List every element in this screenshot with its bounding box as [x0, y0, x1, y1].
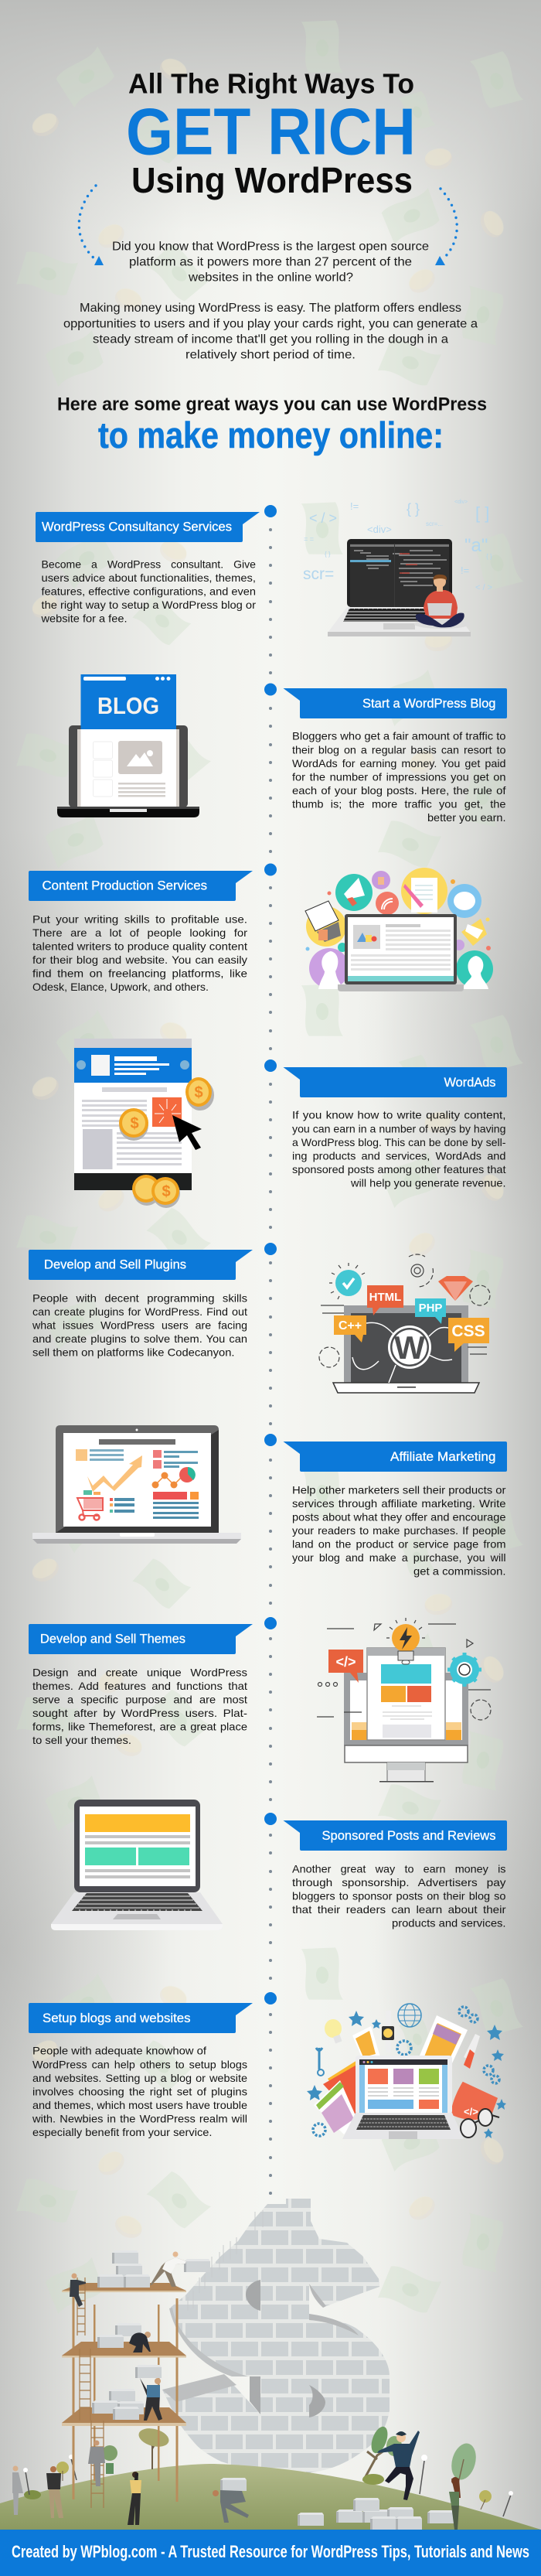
illustration: hill with brick dollar sign [0, 2199, 541, 2530]
subheading: to make money online: [98, 415, 444, 455]
panel: Affiliate Marketing: services through affiliate marketing. Write [292, 1497, 506, 1510]
intro text: steady stream of income that'll get you rolling in the dough in a [93, 333, 448, 346]
panel: Content Production Services [29, 871, 253, 993]
intro text: Did you know that WordPress is the largest open source [112, 240, 429, 254]
icon: web tools and laptop [307, 2004, 506, 2139]
icon: blog on laptop: BLOG [97, 692, 159, 719]
icon: ad page with coins and cursor: $ [130, 1115, 139, 1132]
icon: ad page with coins and cursor [74, 1039, 214, 1208]
icon: ad page with coins and cursor: $ [194, 1084, 203, 1101]
subheading [57, 394, 487, 455]
icon: WordPress plugins laptop [319, 1254, 490, 1393]
workers [12, 2252, 461, 2530]
panel: Affiliate Marketing: get a commission. [413, 1564, 505, 1577]
panel: Develop and Sell Plugins: what issues WordPress users are facing [32, 1319, 247, 1331]
panel: Develop and Sell Plugins [29, 1250, 253, 1358]
panel: Setup blogs and websites: Setup blogs and websites [43, 2011, 190, 2025]
panel: Content Production Services: talented writers to produce quality content [32, 940, 247, 952]
panel: WordAds: you can earn in a number of ways by having [292, 1122, 505, 1134]
intro text: opportunities to users and if you play your cards right, you can generate a [63, 317, 478, 331]
panel: Affiliate Marketing: your readers to make purchases. If people [292, 1524, 506, 1537]
icon: laptop with coder: "a" [464, 535, 488, 556]
panel: WordPress Consultancy Services [36, 512, 260, 624]
panel: WordAds: ing products and services, WordAds and [292, 1149, 505, 1162]
intro text: platform as it powers more than 27 percent of the [129, 255, 412, 269]
title [126, 68, 416, 200]
panel: Develop and Sell Plugins: sell them on platforms like Codecanyon. [32, 1346, 235, 1358]
panel: Affiliate Marketing [283, 1442, 507, 1577]
panel: Start a WordPress Blog [283, 688, 507, 824]
timeline dots [264, 505, 277, 2195]
panel: Sponsored Posts and Reviews: that their readers can learn about their [292, 1903, 506, 1916]
panel: Develop and Sell Plugins: can create plugins for WordPress. Find out [32, 1305, 247, 1318]
panel: WordAds: sponsored posts among other features that [292, 1163, 506, 1175]
icon: analytics laptop [32, 1425, 241, 1544]
panel: Affiliate Marketing: Help other marketers sell their products or [292, 1483, 506, 1496]
title: Using WordPress [131, 160, 413, 200]
panel: WordPress Consultancy Services: users advice about functionalities, themes, [42, 571, 256, 584]
icon: blog on laptop [57, 674, 199, 817]
icon: WordPress plugins laptop: CSS [451, 1322, 485, 1340]
icon: sponsored post laptop [51, 1800, 223, 1930]
intro text: relatively short period of time. [185, 348, 356, 362]
panel: Affiliate Marketing: land on the product or service page from [292, 1537, 505, 1550]
icon: laptop with coder: { } [486, 553, 492, 560]
icon: WordPress plugins laptop: HTML [369, 1291, 401, 1304]
icon: ad page with coins and cursor: $ [162, 1183, 171, 1200]
panel: WordPress Consultancy Services: the right way to setup a WordPress blog or [42, 599, 256, 611]
panel: Sponsored Posts and Reviews: through sponsorship. Advertisers pay [292, 1876, 505, 1888]
panel: Setup blogs and websites: involves choosing the right set of plugins [32, 2085, 247, 2097]
panel: WordPress Consultancy Services: features, effective configurations, and even [42, 585, 256, 597]
icon: laptop with coder: = = [304, 535, 314, 543]
panel: Content Production Services: Content Production Services [42, 879, 207, 893]
panel: Sponsored Posts and Reviews [283, 1820, 507, 1929]
panel: Setup blogs and websites [29, 2003, 253, 2138]
panel: Start a WordPress Blog: thumb is; the more traffic you get, the [292, 797, 506, 810]
panel: Sponsored Posts and Reviews: Another great way to earn money is [292, 1862, 505, 1875]
panel: Develop and Sell Plugins: and create plugins to solve them. You can [32, 1332, 247, 1345]
panel: WordPress Consultancy Services: website for a fee. [40, 612, 127, 624]
icon: laptop with coder [303, 500, 492, 636]
panel: Content Production Services: Put your writing skills to profitable use. [32, 913, 247, 925]
panel: Setup blogs and websites: People with adequate knowhow of [32, 2045, 206, 2057]
panel: Develop and Sell Themes: themes. Add features and functions that [32, 1680, 247, 1692]
intro text: Making money using WordPress is easy. The platform offers endless [80, 302, 461, 315]
panel: Develop and Sell Themes: sought after by WordPress users. Plat- [32, 1707, 247, 1719]
panel: Start a WordPress Blog: Start a WordPress Blog [362, 696, 496, 711]
panel: WordPress Consultancy Services: Become a WordPress consultant. Give [42, 558, 256, 570]
icon: WordPress plugins laptop: W [394, 1329, 425, 1366]
panel: Develop and Sell Themes [29, 1624, 253, 1746]
icon: WordPress plugins laptop: C++ [339, 1319, 362, 1332]
icon: web tools and laptop: </> [464, 2106, 478, 2117]
icon: theme monitor [317, 1618, 491, 1782]
hill [0, 2464, 541, 2530]
panel: Content Production Services: Odesk, Elance, Upwork, and others. [32, 981, 209, 993]
trees and lamps [23, 2424, 513, 2516]
panel: Affiliate Marketing: your blog and make a purchase, you will [292, 1551, 505, 1564]
title: GET RICH [126, 96, 416, 169]
panel: Setup blogs and websites: WordPress can help others to setup blogs [32, 2058, 247, 2070]
panel: Content Production Services: find them on freelancing platforms, like [32, 967, 247, 979]
icon: laptop with coder: [ ] [475, 503, 489, 523]
panel: WordAds: a WordPress blog. This can be done by sell- [292, 1136, 506, 1148]
panel: Affiliate Marketing: posts about what they offer and encourage [292, 1510, 506, 1523]
panel: Setup blogs and websites: and websites. Setting up a blog or website [32, 2072, 247, 2084]
brick dollar sign [162, 2199, 390, 2504]
panel: Develop and Sell Themes: forms, like Themeforest, are a great place [32, 1720, 247, 1732]
subheading: Here are some great ways you can use WordPress [57, 394, 487, 415]
icon: theme monitor: </> [335, 1654, 356, 1670]
stone blocks [92, 2250, 454, 2530]
dotted arrows around intro [79, 186, 457, 265]
panel: Develop and Sell Themes: serve a specific purpose and are most [32, 1693, 247, 1705]
panel: Setup blogs and websites: and themes, which most users have trouble [32, 2099, 247, 2111]
intro text [63, 240, 478, 362]
panel: Sponsored Posts and Reviews: Sponsored Posts and Reviews [322, 1828, 496, 1843]
panel: Develop and Sell Themes: Develop and Sell Themes [40, 1632, 185, 1646]
icon: laptop with coder: < / > [309, 510, 337, 526]
icon: laptop with coder: { } [407, 501, 420, 517]
scaffolding [62, 2277, 186, 2508]
panel: Develop and Sell Themes: Design and create unique WordPress [32, 1666, 247, 1678]
panel: Develop and Sell Plugins: People with decent programming skills [32, 1291, 247, 1304]
panel: WordAds: WordAds [444, 1075, 496, 1090]
panel: Start a WordPress Blog: each of your blog posts. Here, the rule of [292, 784, 506, 797]
icon: WordPress plugins laptop: PHP [419, 1302, 442, 1315]
panel: Sponsored Posts and Reviews: bloggers to sponsor posts on their blog so [292, 1889, 506, 1902]
panel: Setup blogs and websites: especially benefit from your service. [32, 2126, 212, 2138]
panel: Content Production Services: There are a lot of people looking for [32, 926, 247, 939]
panel: Start a WordPress Blog: their blog on a regular basis can resort to [292, 743, 506, 756]
icon: content circles and laptop [305, 868, 493, 991]
panel: Content Production Services: for their blog and website. You can easily [32, 954, 247, 966]
panel: WordAds: will help you generate revenue. [350, 1176, 505, 1189]
panel: WordAds: If you know how to write quality content, [292, 1109, 505, 1121]
panel: Start a WordPress Blog: Bloggers who get a fair amount of traffic to [292, 730, 506, 742]
panel: Start a WordPress Blog: WordAds for earning money. You get paid [292, 757, 505, 769]
icon: laptop with coder: <div> [367, 524, 392, 535]
panel: Sponsored Posts and Reviews: products and services. [392, 1916, 505, 1929]
title: All The Right Ways To [128, 68, 414, 100]
icon: laptop with coder: != [350, 500, 359, 512]
panel: Affiliate Marketing: Affiliate Marketing [390, 1449, 496, 1464]
panel: Setup blogs and websites: with. Newbies in the WordPress realm will [32, 2112, 247, 2124]
panel: Develop and Sell Plugins: Develop and Sell Plugins [44, 1257, 186, 1272]
panel: Start a WordPress Blog: better you earn. [427, 811, 505, 824]
icon: laptop with coder: scr= [303, 565, 334, 583]
intro text: websites in the online world? [188, 271, 353, 285]
icon: laptop with coder: < / > [475, 583, 492, 592]
panel: Develop and Sell Themes: to sell your themes. [32, 1734, 131, 1746]
icon: laptop with coder: != [461, 565, 469, 576]
panel: WordPress Consultancy Services: WordPress Consultancy Services [42, 520, 232, 534]
footer [0, 2530, 541, 2576]
panel: WordAds [283, 1067, 507, 1189]
icon: laptop with coder: { } [325, 551, 331, 558]
icon: laptop with coder: <div> [454, 500, 468, 505]
icon: laptop with coder: scr=... [426, 520, 443, 527]
panel: Start a WordPress Blog: for the number of impressions you get on [292, 770, 505, 783]
